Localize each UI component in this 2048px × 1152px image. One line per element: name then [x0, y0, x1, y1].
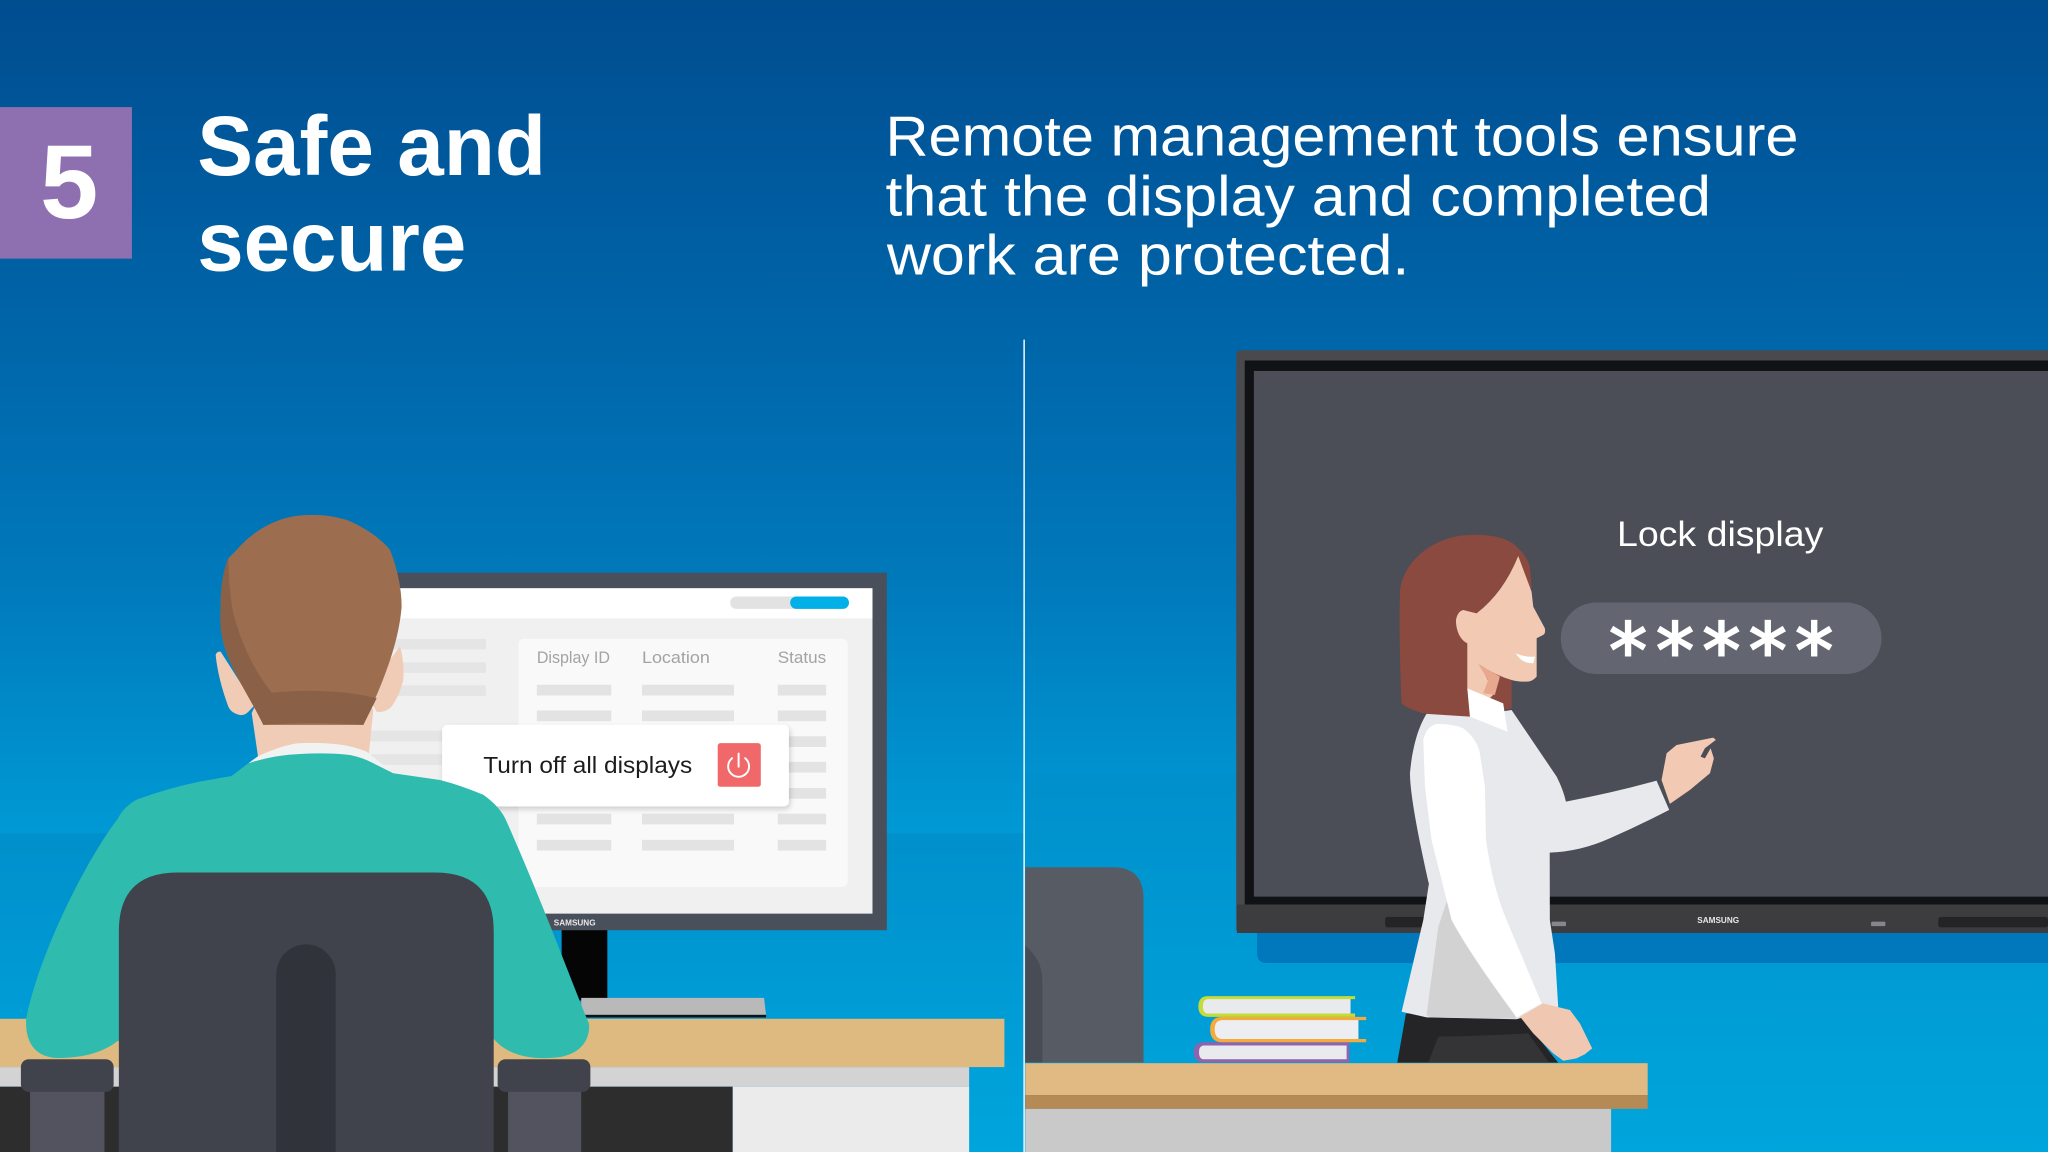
sidebar placeholder rows: [353, 639, 486, 765]
display shadow: [1257, 933, 2048, 963]
classroom chair: [1025, 867, 1144, 1063]
panel divider line: [1023, 340, 1025, 1152]
sleeve highlight: [1423, 724, 1542, 1017]
description text: that the display and completed: [886, 165, 1711, 228]
panel: teacher at interactive display: [1025, 350, 2048, 1152]
panel: admin at desktop monitor: [0, 515, 1004, 1152]
icon: power button: [718, 743, 761, 787]
collar: [248, 743, 393, 773]
display table: Status: [778, 648, 826, 667]
display table: [519, 639, 848, 887]
book: purple: [1194, 1042, 1349, 1062]
shirt lower shade: [1427, 888, 1517, 1019]
title: secure: [197, 193, 466, 288]
popup: turn off all displays: Turn off all displays: [483, 752, 692, 778]
hair: [1400, 535, 1532, 717]
popup: turn off all displays: [442, 725, 789, 807]
pointing hand: [1662, 738, 1716, 804]
desk: [0, 1019, 1004, 1152]
lock display label: Lock display: [1617, 515, 1824, 554]
lower hand: [1520, 1003, 1592, 1061]
display table: Location: [642, 648, 710, 667]
password field: *****: [1609, 607, 1833, 695]
description text: [886, 104, 1799, 286]
neck: [252, 692, 373, 759]
display brand: SAMSUNG: [1697, 915, 1739, 925]
neck and face: [1456, 556, 1545, 703]
shirt: [1402, 710, 1669, 1019]
office chair: [21, 872, 590, 1152]
step number badge: 5: [40, 124, 98, 241]
neck shadow: [1478, 664, 1500, 695]
collar: [1467, 688, 1508, 732]
smile: [1516, 653, 1535, 663]
person from behind: [26, 515, 589, 1058]
hair shadow: [220, 558, 377, 725]
right panel wall band: [1025, 773, 2048, 1152]
step number badge: [0, 107, 132, 259]
teal sweater: [26, 753, 589, 1058]
title: [197, 98, 546, 288]
book: orange: [1210, 1017, 1366, 1042]
book: green: [1198, 996, 1355, 1017]
pants: [1397, 1014, 1558, 1063]
teacher desk: [1025, 1063, 1648, 1152]
description text: work are protected.: [886, 223, 1409, 286]
monitor stand: [562, 927, 766, 1017]
ears: [216, 647, 403, 715]
interactive display: [1236, 350, 2048, 933]
hair: [220, 515, 402, 725]
left panel wall band: [0, 833, 1024, 1152]
stack of books: [1194, 996, 1366, 1062]
display table: Display ID: [537, 648, 610, 667]
teacher: [1397, 535, 1716, 1063]
desktop monitor: [353, 573, 887, 930]
monitor brand: SAMSUNG: [554, 918, 596, 928]
description text: Remote management tools ensure: [886, 104, 1799, 167]
toggle switch: [730, 597, 849, 609]
title: Safe and: [197, 98, 546, 193]
password field: [1561, 603, 1881, 695]
